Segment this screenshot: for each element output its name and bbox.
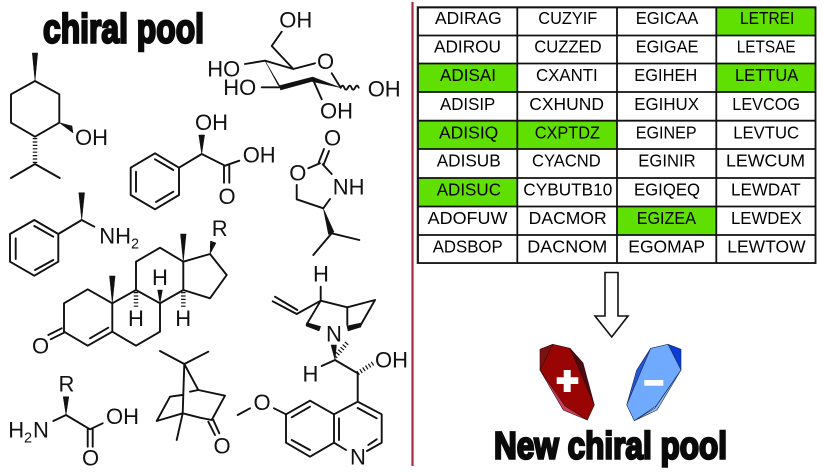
heading: new chiral pool: New chiral pool — [494, 426, 727, 468]
icon: red plus crystal — [540, 344, 594, 420]
molecule: camphor: O — [214, 433, 231, 458]
molecule: quinine: O — [254, 390, 271, 415]
molecule: oxazolidinone: NH — [333, 174, 364, 199]
molecule: glucose: OH — [279, 8, 312, 33]
cell labels: LEWDEX — [731, 208, 802, 228]
cell labels: LETREI — [740, 8, 794, 28]
cell labels: ADIROU — [434, 37, 501, 57]
molecule: steroid: H — [175, 306, 191, 331]
molecule: glucose: OH — [320, 98, 353, 123]
cell labels: DACNOM — [527, 237, 607, 257]
cell labels: EGINEP — [636, 122, 697, 142]
molecule: steroid — [32, 216, 228, 358]
molecule: glucose: O — [317, 49, 334, 74]
molecule: mandelic acid: O — [218, 184, 236, 209]
cell labels: LEWDAT — [731, 180, 801, 200]
cell labels: ADIRAG — [435, 8, 502, 28]
molecule: phenylethylamine: NH — [99, 223, 131, 248]
molecule: steroid: R — [212, 216, 228, 241]
cell labels: EGOMAP — [628, 237, 705, 257]
cell labels: ADISUC — [437, 180, 501, 200]
cell labels: CXPTDZ — [535, 122, 600, 142]
molecule: menthol: OH — [75, 125, 108, 150]
cell labels: CXANTI — [536, 65, 598, 85]
cell labels: ADISAI — [440, 65, 496, 85]
molecule: steroid: H — [128, 306, 144, 331]
molecule: quinine: N — [350, 444, 366, 469]
molecule: phenylethylamine: 2 — [131, 236, 139, 252]
cell labels: LEWTOW — [727, 237, 806, 257]
molecule: mandelic acid — [131, 110, 276, 209]
cell labels: EGIQEQ — [634, 180, 700, 200]
molecule: menthol — [11, 53, 108, 178]
cell labels: ADOFUW — [428, 208, 508, 228]
molecule: quinine: OH — [375, 347, 408, 372]
title: chiral pool: chiral pool — [43, 6, 204, 52]
arrow: down — [595, 272, 628, 337]
cell labels: ADISIQ — [439, 122, 498, 142]
cell labels: ADISIP — [440, 94, 495, 114]
cell labels: EGIZEA — [637, 208, 696, 228]
molecule: amino acid: H — [8, 418, 24, 443]
molecule: quinine: N — [326, 322, 342, 347]
molecule: quinine: H — [302, 362, 318, 387]
cell labels: EGIHUX — [634, 94, 699, 114]
cell labels: LEVCOG — [732, 94, 800, 114]
cell labels: CXHUND — [529, 94, 604, 114]
cell labels: CUZZED — [534, 37, 602, 57]
cell labels: CYACND — [532, 151, 601, 171]
cell labels: EGINIR — [638, 151, 696, 171]
cell labels: CYBUTB10 — [523, 180, 613, 200]
molecule: steroid: O — [32, 333, 49, 358]
cell labels: EGIGAE — [636, 37, 698, 57]
molecule: oxazolidinone — [289, 126, 364, 255]
molecule: glucose — [207, 8, 401, 123]
molecule: amino acid: R — [58, 372, 74, 397]
molecule: amino acid: O — [82, 446, 99, 471]
molecule: amino acid: 2 — [24, 431, 32, 447]
molecule: glucose: OH — [368, 77, 401, 102]
molecule: quinine: H — [313, 262, 329, 287]
molecule: quinine — [238, 262, 408, 469]
divider — [411, 2, 414, 466]
cell labels: CUZYIF — [538, 8, 597, 28]
cell labels: EGIHEH — [634, 65, 697, 85]
cell labels: LEWCUM — [726, 151, 805, 171]
molecule: mandelic acid: OH — [195, 110, 228, 135]
molecule: amino acid: OH — [106, 404, 139, 429]
molecule: amino acid — [8, 372, 139, 471]
molecule: camphor — [157, 351, 231, 458]
molecule: steroid: H — [152, 265, 168, 290]
molecule: oxazolidinone: O — [289, 161, 306, 186]
table: compound codes — [417, 6, 816, 264]
molecule: mandelic acid: OH — [243, 142, 276, 167]
icon: blue minus crystal — [627, 344, 681, 421]
molecule: glucose: HO — [207, 57, 240, 82]
cell labels — [428, 8, 806, 257]
molecule: amino acid: N — [33, 418, 49, 443]
molecule: phenylethylamine — [10, 193, 139, 276]
cell labels: EGICAA — [636, 8, 699, 28]
molecule: oxazolidinone: O — [324, 126, 341, 151]
cell labels: DACMOR — [529, 208, 607, 228]
cell labels: ADISUB — [437, 151, 501, 171]
cell labels: LETTUA — [735, 65, 799, 85]
molecule: glucose: HO — [223, 75, 256, 100]
cell labels: LEVTUC — [733, 122, 799, 142]
green highlighted cells — [418, 8, 815, 235]
cell labels: LETSAE — [737, 37, 796, 57]
cell labels: ADSBOP — [433, 237, 503, 257]
